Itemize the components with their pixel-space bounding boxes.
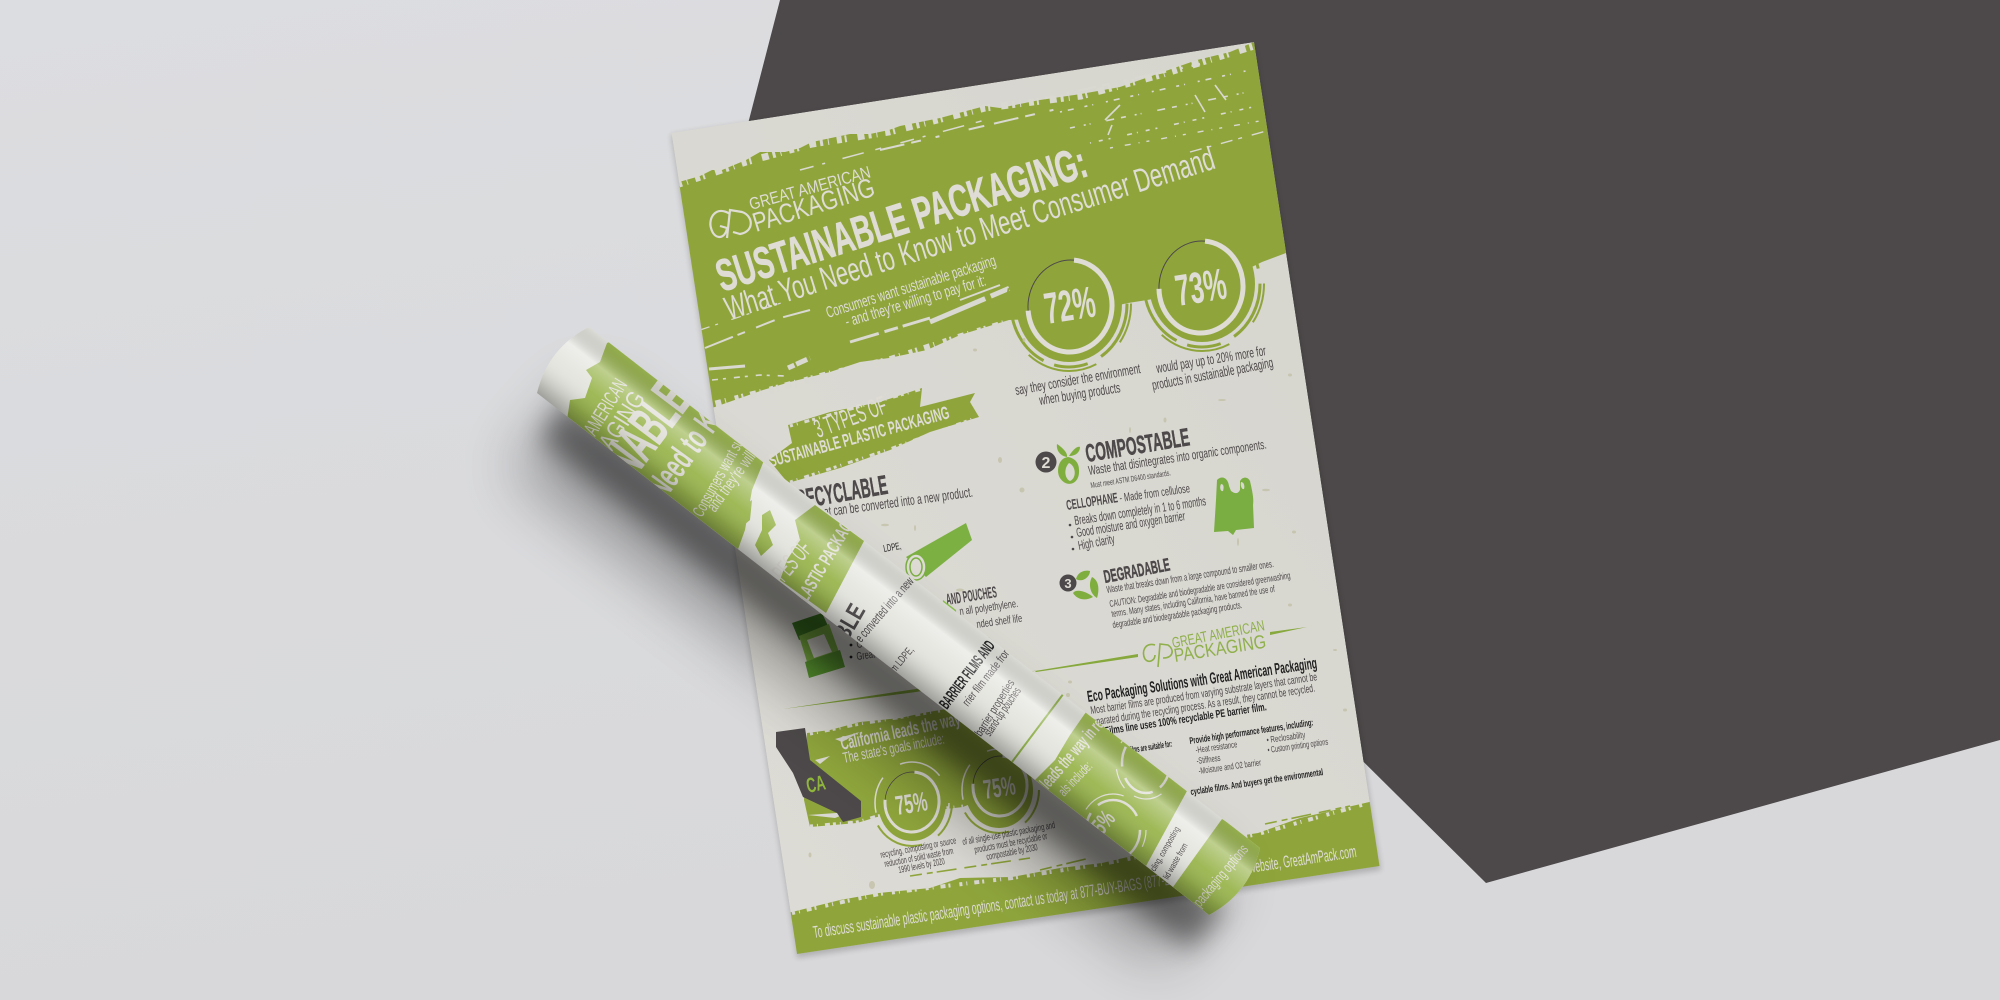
- section: eco packaging solutions: -Heat resistance: [1195, 739, 1238, 755]
- icon: recycling leaves: [1073, 571, 1098, 599]
- section: degradable: [1060, 555, 1291, 631]
- roll section: header: AMERICAN: [580, 375, 632, 440]
- roll section: body text: BLE: [828, 599, 871, 646]
- california map: [776, 728, 861, 822]
- number badge 2: [1036, 452, 1056, 472]
- section: compostable: CELLOPHANE: [1065, 489, 1119, 513]
- section: degradable: Waste that breaks down from a large compound to smaller ones.: [1106, 559, 1274, 596]
- title: SUSTAINABLE PACKAGING:: [710, 136, 1093, 302]
- divider lower left: [783, 670, 1040, 709]
- poster paper: [672, 42, 1380, 954]
- section banner: 3 types: 3 TYPES OF: [810, 390, 891, 444]
- section: eco packaging solutions: Provide high performance features, including:: [1189, 717, 1314, 747]
- icon: film web: [942, 600, 956, 612]
- logo mark: [710, 210, 751, 238]
- roll section: 3 types banner: PES OF: [766, 534, 817, 587]
- section: degradable: terms. Many states, including California, have banned the use of: [1111, 584, 1276, 620]
- poster: [668, 40, 1400, 970]
- section: eco packaging solutions: films are suitable for:: [1129, 739, 1173, 755]
- paper flecks: [808, 338, 1347, 889]
- icon: sprout: [1057, 444, 1080, 484]
- section: compostable: Good moisture and oxygen barrier: [1075, 508, 1187, 540]
- stat captions: would pay up to 20% more for: [1154, 342, 1267, 376]
- roll section: body text: stand-up pouches: [981, 684, 1024, 739]
- stat circle 75% left: 75%: [893, 786, 930, 821]
- roll shadow on background: [510, 380, 1230, 965]
- section banner: 3 types: SUSTAINABLE PLASTIC PACKAGING: [767, 402, 951, 471]
- roll section: body text: e converted into a new p: [852, 569, 921, 645]
- divider with green logo: GREAT AMERICAN: [1171, 617, 1266, 652]
- section banner: 3 types: [767, 388, 979, 483]
- section: eco packaging solutions: • Reclosability: [1266, 730, 1306, 745]
- roll section: footer: [1173, 819, 1270, 930]
- recyclable bullets: Compatible: [856, 634, 897, 651]
- section: compostable: [1036, 423, 1267, 553]
- california band: CA: [804, 771, 828, 798]
- california captions: of all single-use plastic packaging and: [962, 820, 1056, 848]
- intro text: [826, 257, 997, 325]
- header green band: [668, 40, 1300, 410]
- roll section: header: Need to K: [638, 404, 727, 505]
- roll section: header: Consumers want su: [689, 436, 747, 520]
- number badge 3: [1060, 574, 1076, 592]
- section: eco packaging solutions: Eco Packaging Solutions with Great American Packaging: [1086, 655, 1318, 706]
- section: degradable: degradable and biodegradable packaging products.: [1112, 600, 1243, 631]
- california captions: compostable by 2030: [985, 842, 1039, 863]
- roll section: footer: packaging options: [1190, 841, 1252, 911]
- roll section: 3 types banner: [766, 505, 864, 613]
- roll paper: [500, 300, 1300, 950]
- header torn edges: [679, 46, 1254, 408]
- section: recyclable: nded shelf life: [976, 613, 1023, 631]
- section: eco packaging solutions: Most barrier films are produced from varying substrate layers that cannot be: [1090, 671, 1318, 717]
- stat circle 75% right: 75%: [981, 770, 1018, 805]
- section: eco packaging solutions: Eco-Films line uses 100% recyclable PE barrier film.: [1089, 701, 1267, 740]
- section: eco packaging solutions: [1086, 655, 1329, 798]
- roll section: california: als include:: [1055, 758, 1095, 799]
- stat circle 75% right: [959, 747, 1039, 833]
- section: eco packaging solutions: -Stiffness: [1196, 753, 1221, 766]
- roll section: body text: rrier film made from: [959, 643, 1015, 709]
- mockup scene: [485, 0, 2000, 1000]
- california captions: recycling, composting or source: [879, 835, 957, 861]
- california captions: [879, 820, 1056, 876]
- section: degradable: DEGRADABLE: [1102, 555, 1172, 587]
- roll section: header: [567, 338, 776, 556]
- section: recyclable: RECYCLABLE: [794, 470, 890, 515]
- section: recyclable: AND POUCHES: [945, 584, 998, 609]
- stat circle 73%: 73%: [1172, 260, 1230, 316]
- roll section: california: leads the way in re: [1036, 715, 1107, 793]
- stat circle 72%: 72%: [1041, 278, 1099, 334]
- section: recyclable: [798, 475, 1022, 628]
- recyclable bullets: [850, 642, 876, 660]
- section: eco packaging solutions: separated during the recycling process. As a result, they cannot be recycled.: [1089, 683, 1316, 729]
- stat circle 73%: [1144, 238, 1265, 352]
- stat circle 72%: [1007, 258, 1132, 372]
- california band: California leads the way: [839, 709, 963, 755]
- number badge 2: 2: [1042, 455, 1051, 472]
- number badge 3: 3: [1064, 576, 1072, 591]
- section: recyclable: LDPE,: [883, 541, 902, 555]
- section: compostable: Breaks down completely in 1 to 6 months: [1073, 493, 1207, 528]
- roll shading: [500, 300, 1300, 950]
- section: compostable: High clarity: [1077, 531, 1116, 553]
- california captions: reduction of solid waste from: [883, 846, 954, 870]
- icon: pouch: [792, 613, 845, 678]
- section: compostable: Waste that disintegrates into organic components.: [1087, 437, 1267, 478]
- roll section: body text: barrier properties: [972, 677, 1017, 739]
- recyclable bullets: Great clarity: [856, 645, 897, 663]
- intro text: Consumers want sustainable packaging: [824, 253, 998, 322]
- stat captions: products in sustainable packaging: [1151, 354, 1274, 393]
- section: recyclable: Material that can be converted into a new product.: [783, 484, 974, 525]
- roll section: california: [1035, 712, 1187, 866]
- roll section: 3 types banner: LASTIC PACKAGI: [793, 515, 859, 606]
- logo: Great American Packaging: [710, 163, 878, 238]
- divider with green logo: PACKAGING: [1172, 632, 1268, 667]
- footer band: To discuss sustainable plastic packaging options, contact us today at 877-BUY-BAGS (877-289-2247) or visit our website, GreatAmPack.com: [812, 842, 1358, 942]
- california band: [776, 710, 1032, 827]
- california captions: 1990 levels by 2020: [897, 856, 946, 876]
- logo mark green: [1143, 644, 1172, 667]
- icon: film roll: [906, 523, 972, 580]
- intro text: - and they're willing to pay for it:: [843, 273, 988, 331]
- divider with green logo: [1035, 617, 1307, 672]
- roll section: captions: cling, composting: [1148, 825, 1182, 873]
- section: eco packaging solutions: -Moisture and O2 barrier: [1198, 757, 1262, 776]
- dark backdrop shape: [742, 0, 2000, 883]
- stat circle 75% left: [872, 760, 952, 846]
- stat captions: say they consider the environment: [1014, 360, 1142, 398]
- section: recyclable: n all polyethylene.: [959, 598, 1019, 618]
- icon: compostable bag: [1214, 478, 1254, 535]
- section: compostable: - Made from cellulose: [1118, 481, 1191, 505]
- roll section: captions: [1148, 825, 1190, 881]
- roll contact shadow: [540, 400, 1225, 950]
- stat captions: when buying products: [1037, 379, 1121, 408]
- california captions: products must be recyclable or: [973, 831, 1048, 856]
- section: compostable: Must meet ASTM D6400 standards.: [1090, 468, 1171, 490]
- roll section: header: AGING: [593, 386, 651, 455]
- roll section: california: 75%: [1081, 806, 1121, 846]
- logo line two: PACKAGING: [749, 172, 878, 238]
- section: compostable: COMPOSTABLE: [1083, 423, 1192, 468]
- section: eco packaging solutions: • Custom printing options: [1267, 737, 1329, 755]
- roll section: header: and they're willi: [703, 446, 761, 515]
- roll section: captions: lid waste from: [1161, 841, 1190, 881]
- poster shadow: [671, 46, 1381, 958]
- roll section: body text: m LDPE,: [888, 644, 917, 675]
- roll section: header: NABLE: [591, 369, 704, 488]
- footer band: [790, 802, 1380, 954]
- header paper scratches: [700, 64, 1270, 380]
- rolled poster: [500, 300, 1300, 950]
- roll section: body text: BARRIER FILMS AND P: [937, 632, 1003, 712]
- section: degradable: CAUTION: Degradable and biodegradable are considered greenwashing: [1109, 570, 1291, 610]
- subtitle: What You Need to Know to Meet Consumer Demand: [720, 139, 1219, 327]
- california band: The state's goals include:: [842, 731, 946, 767]
- roll section: body text: [828, 569, 1064, 762]
- section: eco packaging solutions: cyclable films. And buyers get the environmental: [1190, 767, 1324, 798]
- logo line one: GREAT AMERICAN: [747, 163, 873, 214]
